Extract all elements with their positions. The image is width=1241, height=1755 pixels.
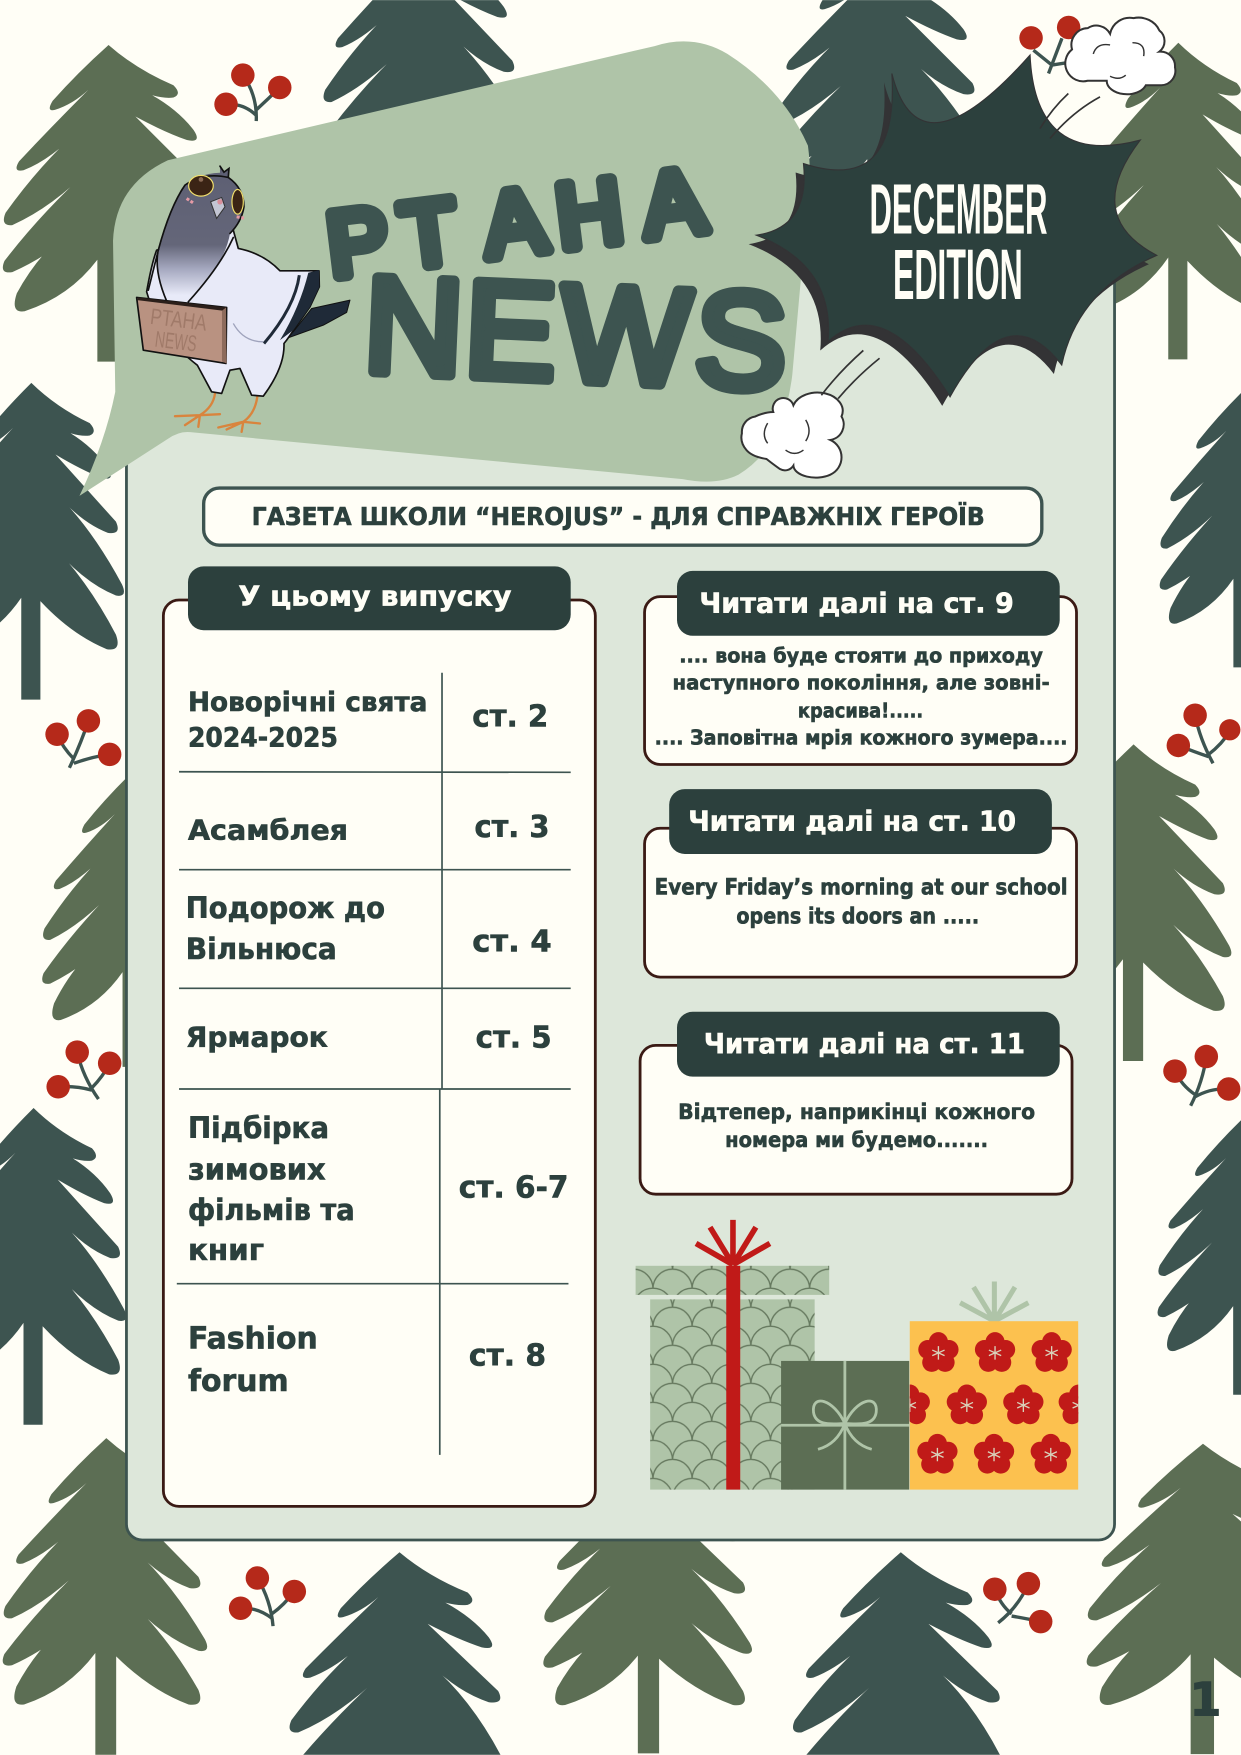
row: trip: Вільнюса [186,932,337,966]
teaser: page 9: .... вона буде стояти до приходу [679,644,1043,668]
icon: puff top right [1065,18,1175,94]
row: films and books: ст. 6-7 [459,1171,568,1206]
row: films and books: книг [188,1233,264,1267]
title word: NEWS: NEWS [361,247,790,419]
contents heading: У цьому випуску [238,580,511,613]
table rules [177,673,571,1455]
teaser: page 10: opens its doors an ..... [736,904,979,929]
pigeon beak and blush [187,197,244,218]
pigeon legs [175,393,260,432]
contents heading tab [188,566,571,630]
speed lines bottom [821,350,880,399]
sign lettering: NEWS [154,326,198,357]
subtitle banner: ГАЗЕТА ШКОЛИ “HEROJUS” - ДЛЯ СПРАВЖНІХ ГЕРОЇВ [252,501,985,531]
row: holidays: 2024-2025 [188,723,338,754]
icon: berries right upper [1167,703,1240,763]
speed lines top [1040,94,1100,138]
pigeon wing stripes [233,270,319,343]
icon: berries bottom right [983,1572,1052,1633]
pigeon head and neck [158,166,244,302]
row: fashion: forum [188,1364,289,1399]
icon: berries top right [1019,16,1080,73]
sign lettering [146,303,209,358]
teaser: page 9 [655,644,1068,749]
gift: green box with bow [781,1361,909,1490]
row: fair: Ярмарок [186,1020,328,1053]
row: holidays: ст. 2 [472,699,548,734]
row: films and books [188,1111,568,1267]
icon: berries bottom left [229,1566,306,1626]
burst shadow [749,64,1149,406]
pigeon body [147,230,319,396]
title word: PTAHA: PTAHA [322,150,710,296]
row: trip: Подорож до [186,891,385,925]
row: films and books: фільмів та [188,1193,355,1227]
tab: page 9 [677,571,1060,636]
row: assembly: Асамблея [188,813,348,846]
pigeon neck outline [148,166,244,308]
row: fair: ст. 5 [476,1021,552,1056]
teaser: page 9: красива!..... [798,698,923,722]
page number: 1 [1190,1673,1221,1727]
tab: page 11 [677,1012,1060,1077]
teaser: page 10: Every Friday’s morning at our school [655,875,1068,900]
tab: page 10 [669,789,1052,854]
row: films and books: зимових [188,1153,326,1187]
burst badge [756,55,1157,397]
illustration: gifts [636,1220,1099,1490]
panel: read more page 9 [645,571,1077,764]
row: assembly: ст. 3 [474,810,549,845]
row: fashion: ст. 8 [469,1338,546,1373]
row: fashion [188,1322,546,1399]
panel: table of contents [163,566,595,1506]
icon: berries left lower [46,1040,121,1099]
row: films and books: Підбірка [188,1111,329,1145]
pigeon eyes [189,175,243,214]
heading: page 9: Читати далі на ст. 9 [699,586,1014,619]
main green panel [126,258,1115,1540]
row: assembly [188,810,549,846]
teaser: page 11: Відтепер, наприкінці кожного [678,1100,1035,1125]
row: trip [186,891,552,966]
row: holidays: Новорічні свята [188,687,427,718]
panel: read more page 10 [645,789,1077,977]
heading: page 10: Читати далі на ст. 10 [688,805,1016,838]
icon: puff bottom [741,393,844,478]
teaser: page 9: .... Заповітна мрія кожного зумера.... [655,725,1068,749]
hanging sign [137,297,227,363]
gift: tall scaled box [636,1220,829,1490]
title [322,150,790,419]
icon: berries left upper [45,709,121,768]
teaser: page 11: номера ми будемо....... [725,1128,988,1153]
sign lettering: PTAHA [149,303,209,336]
row: fashion: Fashion [188,1322,318,1357]
pigeon tail [280,300,350,341]
burst badge: EDITION [893,235,1023,315]
panel: read more page 11 [640,1012,1072,1194]
icon: berries right lower [1163,1045,1240,1106]
icon: berries top left [214,63,292,121]
subtitle banner [204,488,1042,545]
illustration: pigeon with sign [137,166,350,432]
row: fair [186,1020,552,1056]
green speech bubble [79,41,810,496]
row: holidays [188,687,548,754]
teaser: page 10 [655,875,1068,929]
teaser: page 9: наступного покоління, але зовні- [673,671,1050,695]
row: trip: ст. 4 [472,924,552,959]
heading: page 11: Читати далі на ст. 11 [704,1027,1025,1060]
gift: yellow flower box [910,1282,1078,1490]
teaser: page 11 [678,1100,1035,1153]
